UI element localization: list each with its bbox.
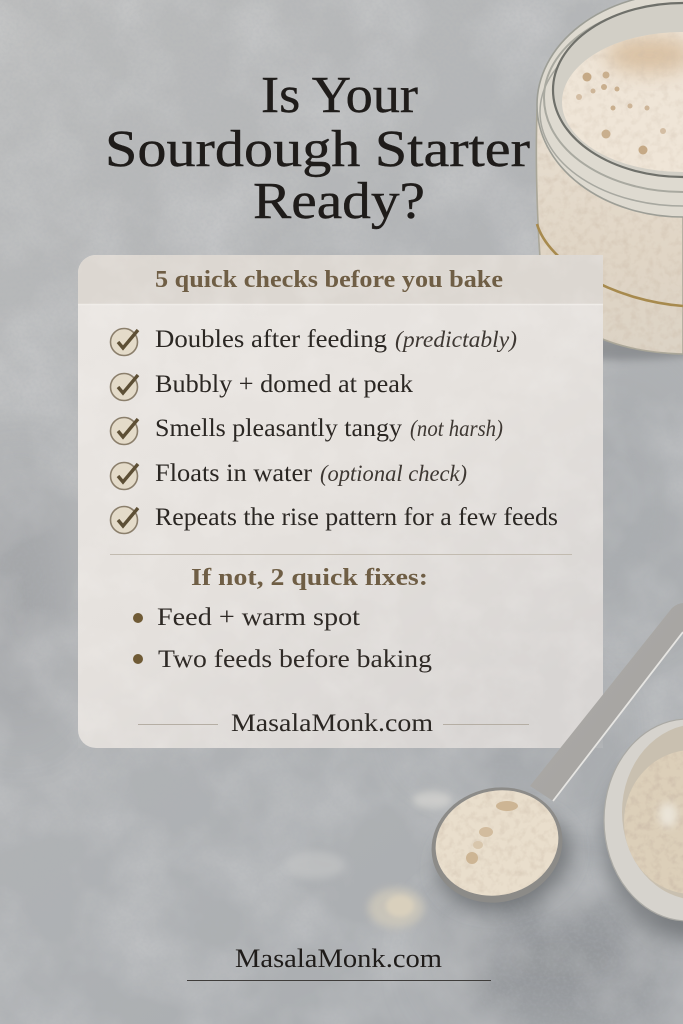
check item 1: Doubles after feeding [155,326,388,353]
footer website credit: MasalaMonk.com [235,944,442,973]
check item 2: Bubbly + domed at peak [155,371,414,398]
fix item 1: Feed + warm spot [157,604,360,631]
flour bowl [604,719,683,940]
check item 1: (predictably) [395,327,517,352]
panel header band [78,255,603,304]
title: Sourdough Starter [105,121,530,178]
glass panel [78,255,603,748]
check item 4: Floats in water [155,460,313,487]
title: Is Your [261,67,418,124]
fix item 2: Two feeds before baking [158,646,433,673]
flour dust [285,791,452,928]
glass rim [537,0,683,217]
check item 3: Smells pleasantly tangy [155,415,403,442]
check item 4: (optional check) [320,461,467,486]
rise marker band [537,224,683,306]
starter surface [560,30,683,172]
check item 1 [110,326,517,356]
header label: 5 quick checks before you bake [155,267,503,293]
fixes heading: If not, 2 quick fixes: [191,565,428,591]
jar body [536,100,683,354]
check item 4 [110,460,467,490]
panel website credit: MasalaMonk.com [231,710,434,737]
check item 5: Repeats the rise pattern for a few feeds [155,504,558,531]
title [105,67,530,230]
check item 3 [110,415,503,444]
title: Ready? [253,173,425,230]
check item 3: (not harsh) [410,416,503,441]
measuring spoon [418,603,683,924]
jar of sourdough starter [530,0,683,360]
